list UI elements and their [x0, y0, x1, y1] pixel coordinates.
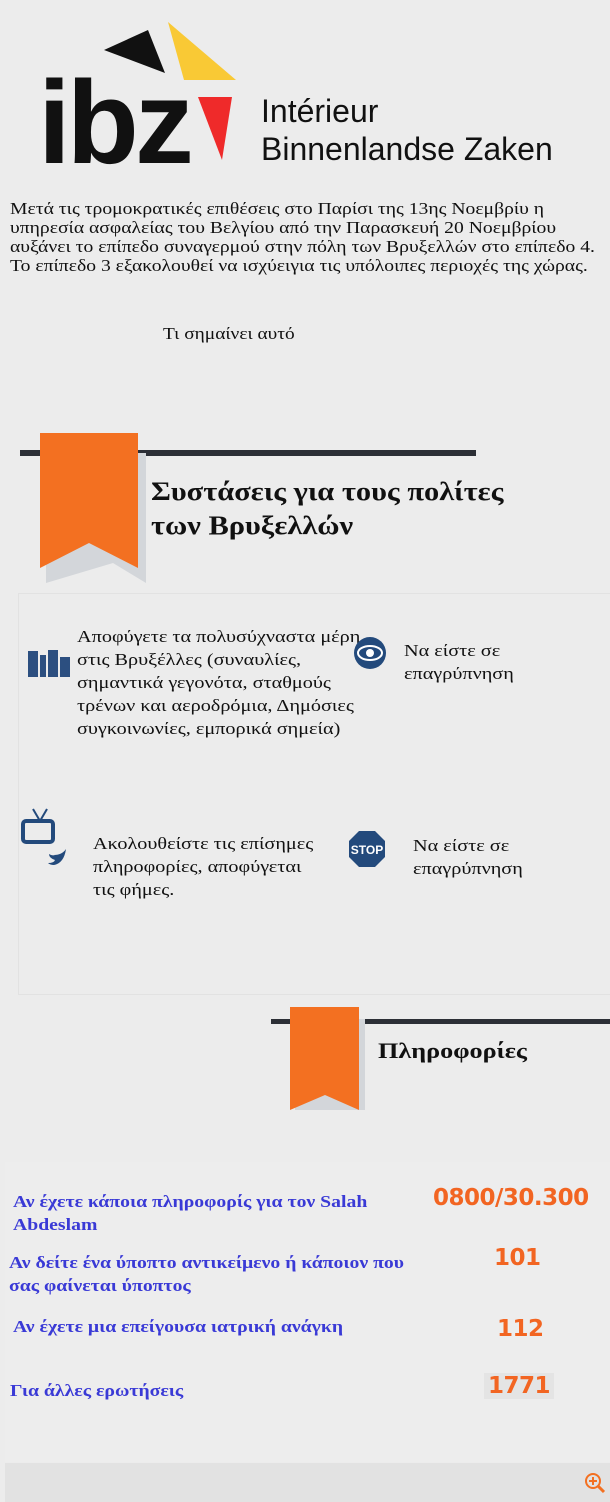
text: follow official info: τις φήμες. — [93, 880, 174, 899]
text: be vigilant 2: επαγρύπνηση — [413, 859, 523, 878]
logo text — [261, 93, 553, 167]
intro text: Μετά τις τρομοκρατικές επιθέσεις στο Παρίσι της 13ης Νοεμβρίυ η — [10, 199, 544, 218]
icon: stop sign — [349, 831, 385, 867]
panel: phone numbers: 101 — [494, 1245, 541, 1271]
icon: ibz letters — [38, 22, 236, 189]
row 2: σας φαίνεται ύποπτος — [9, 1276, 191, 1295]
heading text: των Βρυξελλών — [151, 511, 353, 540]
section header: recommendations — [20, 433, 504, 583]
subheading: Τι σημαίνει αυτό — [163, 324, 295, 343]
text: avoid crowded places: σημαντικά γεγονότα, σταθμούς — [77, 673, 331, 692]
icon: zoom — [585, 1473, 605, 1493]
panel: phone numbers: 1771 — [488, 1373, 550, 1399]
icon: stop sign: STOP — [351, 843, 383, 857]
logo text: Binnenlandse Zaken — [261, 131, 553, 167]
intro text: υπηρεσία ασφαλείας του Βελγίου από την Παρασκευή 20 Νοεμβρίου — [10, 218, 556, 237]
text: be vigilant 1: επαγρύπνηση — [404, 664, 514, 683]
intro text: Το επίπεδο 3 εξακολουθεί να ισχύειγια τις υπόλοιπες περιοχές της χώρας. — [10, 256, 588, 275]
text: be vigilant 1: Να είστε σε — [404, 641, 500, 660]
text: follow official info — [93, 834, 314, 899]
panel: phone numbers — [5, 1162, 610, 1462]
text: be vigilant 2 — [413, 836, 523, 878]
text: avoid crowded places: τρένων και αεροδρόμια, Δημόσιες — [77, 696, 354, 715]
icon: tv and twitter — [21, 808, 66, 865]
logo — [40, 22, 553, 174]
text: avoid crowded places: Αποφύγετε τα πολυσύχναστα μέρη — [77, 627, 360, 646]
logo text: Intérieur — [261, 93, 379, 129]
icon: eye — [354, 637, 386, 669]
text: avoid crowded places: συγκοινωνίες, εμπορικά σημεία) — [77, 719, 340, 738]
row 2: Αν δείτε ένα ύποπτο αντικείμενο ή κάποιον που — [9, 1253, 404, 1272]
text: be vigilant 1 — [404, 641, 514, 683]
text: be vigilant 2: Να είστε σε — [413, 836, 509, 855]
panel: phone numbers: 0800/30.300 — [433, 1185, 589, 1211]
row 1: Αν έχετε κάποια πληροφορίς για τον Salah — [13, 1192, 367, 1211]
text: avoid crowded places: στις Βρυξέλλες (συναυλίες, — [77, 650, 301, 669]
row 2 — [9, 1253, 404, 1295]
intro text: αυξάνει το επίπεδο συναγερμού στην πόλη των Βρυξελλών στο επίπεδο 4. — [10, 237, 595, 256]
icon: city — [28, 650, 70, 677]
section header: info — [271, 1007, 610, 1110]
text: avoid crowded places — [77, 627, 360, 738]
row 4: Για άλλες ερωτήσεις — [10, 1381, 183, 1400]
heading text: Συστάσεις για τους πολίτες — [151, 477, 503, 506]
row 1: Abdeslam — [13, 1215, 97, 1234]
text: follow official info: Ακολουθείστε τις επίσημες — [93, 834, 313, 853]
text: follow official info: πληροφορίες, αποφύγεται — [93, 857, 301, 876]
row 1 — [13, 1192, 368, 1234]
panel: phone numbers: 112 — [497, 1316, 544, 1342]
panel: recommendations — [18, 593, 610, 995]
heading text — [151, 477, 504, 540]
intro text — [10, 199, 595, 275]
heading text: Πληροφορίες — [378, 1038, 527, 1063]
row 3: Αν έχετε μια επείγουσα ιατρική ανάγκη — [13, 1317, 343, 1336]
